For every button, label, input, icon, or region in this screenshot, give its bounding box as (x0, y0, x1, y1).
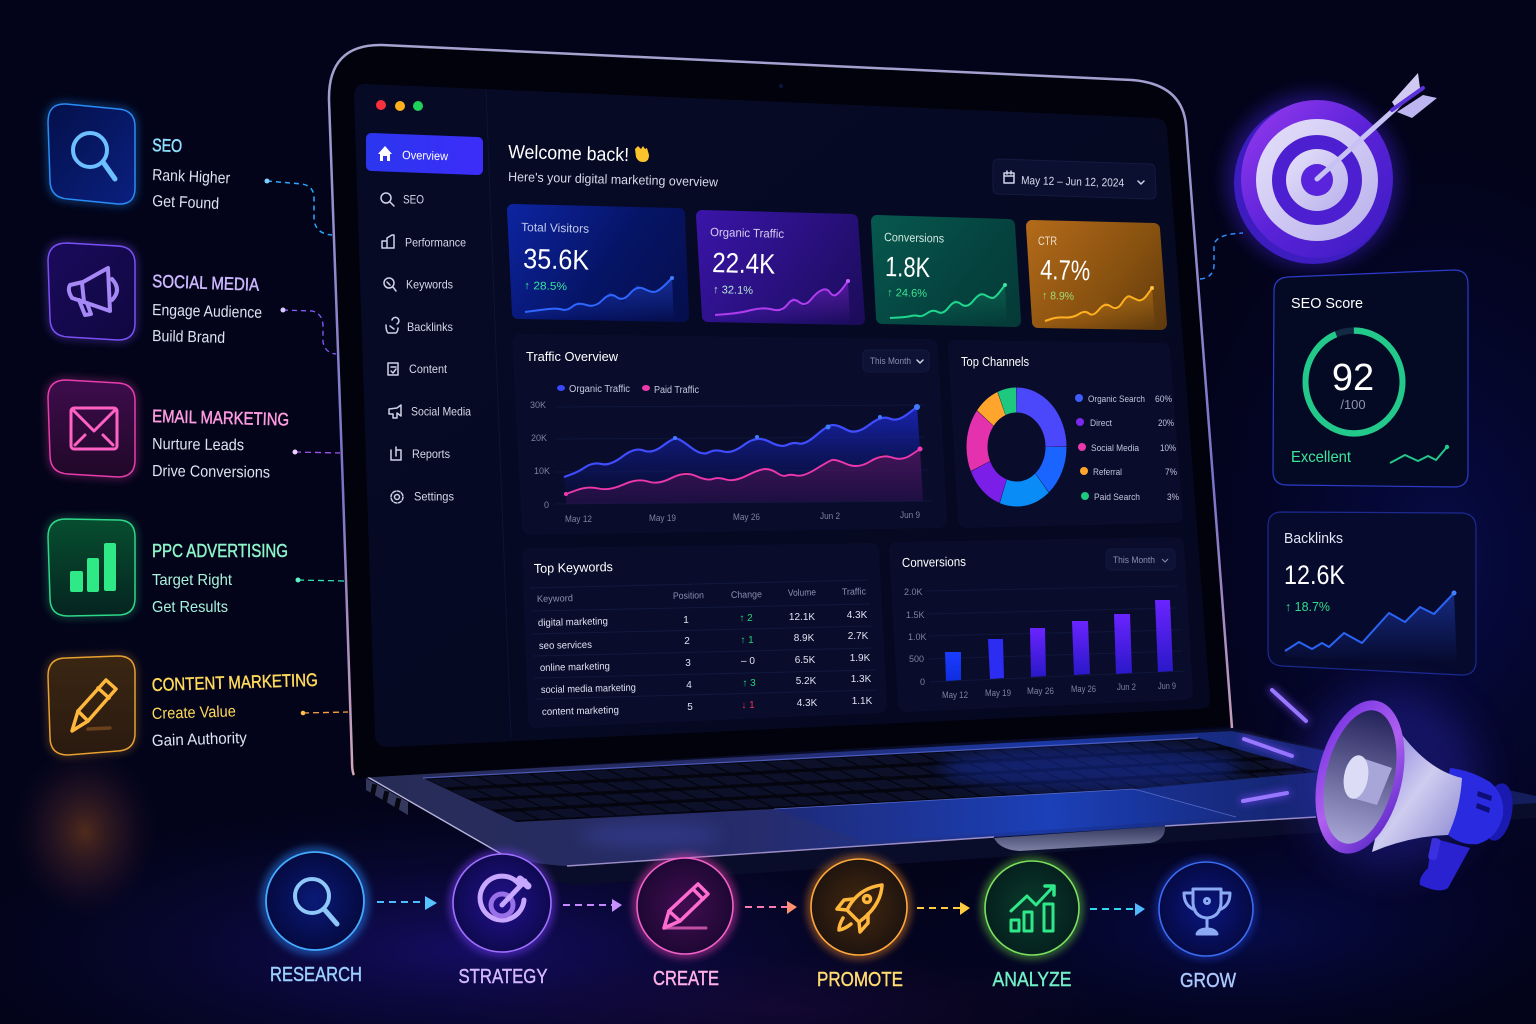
connector: email (292, 450, 340, 454)
channel legend: 3% (1167, 492, 1179, 503)
donut chart (977, 400, 1056, 494)
icon: rocket (837, 885, 882, 932)
nav settings: Settings (414, 490, 454, 504)
label: promote: PROMOTE (817, 969, 903, 991)
table rows: 1.1K (852, 696, 873, 707)
table rows: 1.9K (850, 653, 871, 664)
table rows: ↑ 1 (740, 635, 754, 646)
process: create (637, 858, 733, 954)
legend: Paid Traffic (654, 385, 699, 396)
table header: Traffic (842, 586, 866, 598)
arrow: analyze to grow (1090, 903, 1145, 916)
gauge ring (1306, 331, 1402, 433)
date picker: May 12 – Jun 12, 2024 (1021, 175, 1125, 190)
x axis (942, 681, 1176, 700)
sidebar (366, 100, 483, 504)
channel legend: Referral (1093, 467, 1122, 478)
nav social media (389, 404, 471, 418)
panel: seo service box (48, 104, 135, 204)
laptop lid (329, 45, 1232, 778)
x axis: May 19 (649, 513, 676, 523)
connector: ppc (296, 578, 345, 582)
panel heading: Traffic Overview (526, 349, 619, 364)
x axis: May 26 (1071, 684, 1096, 694)
card organic traffic (702, 216, 859, 322)
legend (557, 384, 699, 396)
table rows: 5.2K (796, 676, 817, 687)
channel legend: 10% (1160, 443, 1176, 454)
text: ppc advertising: Get Results (152, 599, 228, 616)
table rows: 5 (687, 702, 693, 713)
collar (1443, 768, 1503, 844)
nav performance (382, 235, 466, 250)
table rows: content marketing (542, 705, 619, 718)
table rows: seo services (539, 640, 592, 652)
table rows: digital marketing (538, 616, 608, 629)
text: content marketing: CONTENT MARKETING (151, 670, 318, 695)
table rows: 4.3K (847, 610, 868, 621)
x axis: Jun 9 (1158, 681, 1176, 691)
text: seo: Rank Higher (152, 167, 231, 187)
icon: target with arrow (1225, 73, 1437, 268)
table rows: 3 (685, 658, 691, 669)
text: social media: Build Brand (152, 328, 225, 347)
card conversions (877, 221, 1015, 323)
card total visitors: 35.6K (523, 243, 590, 276)
bar chart (945, 600, 1173, 681)
panel: seo score (1273, 270, 1468, 487)
y axis (904, 587, 927, 687)
process: research (265, 851, 365, 951)
nav content (388, 362, 448, 376)
score value: /100 (1340, 397, 1366, 412)
text: social media: SOCIAL MEDIA (152, 271, 259, 295)
text: ppc advertising (152, 541, 288, 616)
icon: envelope (71, 408, 117, 449)
nav settings (391, 490, 454, 504)
icon: pencil (72, 680, 116, 731)
icon: megaphone (1300, 690, 1517, 890)
channel legend (1075, 394, 1179, 503)
channel legend: 60% (1155, 394, 1172, 405)
laptop ports (366, 778, 408, 815)
x axis: Jun 2 (1117, 682, 1136, 692)
channel legend: Direct (1090, 418, 1112, 429)
label: grow: GROW (1180, 970, 1236, 992)
table rows: social media marketing (541, 683, 636, 696)
panel: backlinks (1268, 512, 1476, 675)
panel heading: Top Keywords (534, 559, 614, 576)
panel heading: Top Channels (961, 354, 1029, 369)
connector: target (1200, 233, 1243, 279)
arrow: strategy to create (563, 899, 622, 912)
card ctr: ↑ 8.9% (1042, 290, 1074, 303)
text: social media: Engage Audience (152, 302, 262, 322)
nav reports: Reports (412, 447, 450, 461)
card ctr: CTR (1038, 234, 1057, 248)
driver (1340, 753, 1392, 805)
table rows: 2 (684, 636, 690, 647)
panel: social media box (48, 243, 135, 340)
x axis: May 26 (1027, 686, 1054, 696)
label: strategy: STRATEGY (458, 966, 548, 988)
panel: top keywords (530, 551, 879, 720)
end cap (1479, 781, 1517, 843)
window dots (376, 100, 423, 111)
table rows: ↑ 2 (739, 613, 753, 624)
horn (1372, 732, 1462, 852)
month selector: This Month (1113, 555, 1155, 565)
table rows: 8.9K (794, 633, 815, 644)
x axis: May 12 (565, 514, 592, 524)
laptop screen (354, 84, 1210, 747)
panel: traffic overview (520, 342, 939, 527)
table header: Position (673, 590, 704, 602)
y axis: 30K (530, 400, 546, 410)
line chart (564, 404, 923, 504)
card organic traffic: 22.4K (712, 247, 776, 280)
table header: Volume (788, 587, 816, 599)
card conversions: Conversions (884, 230, 944, 246)
channel legend: 7% (1165, 467, 1177, 478)
channel legend: Organic Search (1088, 394, 1145, 405)
process: grow (1159, 862, 1253, 956)
y axis: 0 (920, 677, 925, 687)
nav content: Content (409, 362, 448, 376)
y axis: 0 (544, 500, 549, 510)
text: email marketing: Drive Conversions (152, 463, 270, 482)
channel legend: Paid Search (1094, 492, 1140, 503)
x axis: May 19 (985, 688, 1011, 698)
nav reports (391, 447, 450, 461)
nav backlinks (386, 317, 453, 334)
icon: trophy (1184, 889, 1230, 934)
table header: Change (731, 589, 762, 601)
handle (1420, 837, 1470, 890)
y axis: 1.5K (906, 610, 925, 620)
card conversions: ↑ 24.6% (887, 287, 927, 300)
text: email marketing (152, 406, 289, 482)
nav backlinks: Backlinks (407, 320, 453, 334)
nav social media: Social Media (411, 404, 471, 418)
y axis (530, 400, 550, 510)
connector: seo (264, 178, 332, 235)
text: social media (152, 271, 262, 347)
table rows: 4.3K (797, 698, 818, 709)
text: content marketing (151, 670, 318, 750)
label: create: CREATE (653, 968, 719, 990)
laptop hinge notch (994, 826, 1165, 851)
x axis: May 26 (733, 512, 760, 522)
panel: ppc box (48, 519, 135, 616)
card ctr (1032, 226, 1161, 328)
laptop base (366, 728, 1536, 885)
icon: magnifier (73, 133, 115, 179)
card total visitors: Total Visitors (521, 220, 589, 236)
panel: top channels (956, 348, 1179, 520)
change: ↑ 18.7% (1285, 600, 1330, 614)
label: research: RESEARCH (270, 964, 362, 986)
nav performance: Performance (405, 236, 466, 250)
table rows: ↑ 3 (742, 678, 756, 689)
excellent label: Excellent (1291, 449, 1352, 466)
connector: social media (280, 308, 336, 354)
table rows: 12.1K (789, 612, 815, 623)
month selector (1106, 549, 1175, 570)
text: email marketing: EMAIL MARKETING (152, 406, 289, 430)
sparkline (1390, 445, 1449, 463)
icon: megaphone (69, 268, 117, 315)
legend: Organic Traffic (569, 384, 630, 395)
nav overview active: Overview (402, 148, 449, 163)
table header (537, 586, 866, 605)
icon: magnifier (295, 879, 337, 924)
icon: bar signal (70, 543, 116, 592)
card total visitors: ↑ 28.5% (524, 280, 567, 293)
y axis: 10K (534, 466, 550, 476)
channel legend: 20% (1158, 418, 1174, 429)
y axis: 1.0K (908, 632, 927, 642)
panel: conversions (897, 545, 1185, 704)
channel legend: Social Media (1091, 443, 1140, 454)
icon: target (480, 876, 528, 920)
nav SEO (381, 192, 424, 206)
burst lines (1243, 690, 1306, 801)
text: seo: SEO (152, 135, 183, 156)
table rows (538, 610, 873, 718)
arrow: research to strategy (377, 896, 437, 910)
connector: content (301, 711, 348, 715)
table header: Keyword (537, 593, 573, 605)
text: content marketing: Create Value (152, 703, 236, 723)
panel: email box (48, 380, 135, 477)
table rows: ↓ 1 (741, 700, 755, 711)
text: seo: Get Found (152, 193, 220, 213)
table rows: 1.3K (851, 674, 872, 685)
text: ppc advertising: PPC ADVERTISING (152, 541, 288, 561)
card total visitors (513, 210, 683, 320)
table rows: online marketing (540, 661, 610, 674)
card ctr: 4.7% (1040, 254, 1091, 286)
date picker (993, 159, 1156, 199)
x axis: May 12 (942, 690, 968, 700)
table rows: 1 (683, 615, 689, 626)
y axis: 20K (531, 433, 547, 443)
arrow: create to promote (745, 901, 797, 914)
text: email marketing: Nurture Leads (152, 436, 244, 454)
month selector (863, 350, 929, 372)
y axis: 2.0K (904, 587, 923, 597)
process: analyze (985, 861, 1079, 955)
grid (555, 405, 931, 504)
process: strategy (453, 854, 551, 952)
icon: growth chart (1011, 886, 1054, 931)
arrow shaft (1317, 73, 1437, 179)
nav keywords (384, 278, 453, 292)
label: analyze: ANALYZE (992, 969, 1072, 991)
card organic traffic: ↑ 32.1% (713, 284, 753, 297)
icon: pencil (664, 884, 708, 928)
nav overview active (366, 133, 483, 175)
x axis: Jun 2 (820, 511, 840, 521)
icon: waving hand (635, 146, 649, 162)
table rows: – 0 (741, 656, 755, 667)
table rows: 2.7K (848, 631, 869, 642)
rim (1302, 692, 1418, 862)
y axis: 500 (909, 654, 924, 664)
panel: content box (48, 656, 135, 755)
table rows: 6.5K (795, 655, 816, 666)
nav SEO: SEO (403, 192, 424, 206)
card title: Backlinks (1284, 530, 1343, 547)
text: seo (152, 135, 231, 213)
card organic traffic: Organic Traffic (710, 225, 784, 241)
card conversions: 1.8K (885, 251, 931, 283)
subheading: Here's your digital marketing overview (508, 169, 719, 190)
table rows: 4 (686, 680, 692, 691)
x axis: Jun 9 (900, 510, 920, 520)
month selector: This Month (870, 356, 911, 366)
panel heading: Conversions (902, 554, 966, 570)
nav keywords: Keywords (406, 278, 453, 292)
value: 12.6K (1284, 560, 1345, 590)
text: content marketing: Gain Authority (152, 730, 247, 750)
line chart (1285, 590, 1457, 664)
process: promote (811, 859, 907, 955)
heading welcome: Welcome back! (508, 142, 629, 166)
x axis (565, 510, 920, 524)
card title: SEO Score (1291, 295, 1363, 312)
score value: 92 (1332, 357, 1374, 399)
arrow: promote to analyze (917, 902, 970, 915)
text: ppc advertising: Target Right (152, 572, 233, 589)
